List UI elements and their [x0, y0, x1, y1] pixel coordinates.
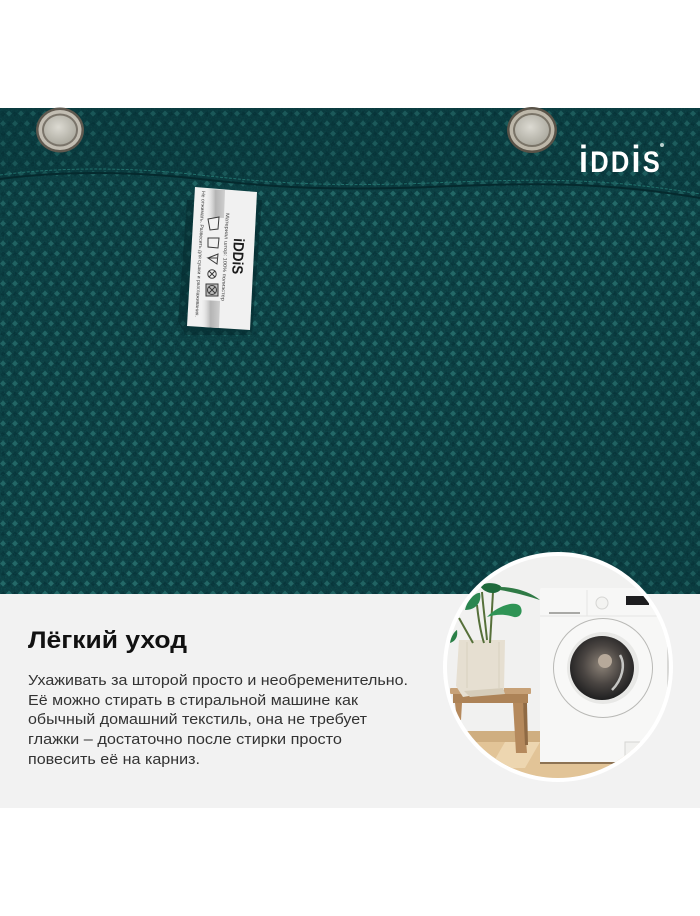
- wall: [447, 556, 636, 731]
- body text: повесить её на карниз.: [28, 751, 200, 768]
- label care icons: [206, 217, 219, 296]
- care label: [187, 187, 257, 330]
- grommet left: [36, 108, 84, 152]
- label material text: Материал штор: 100% полиэстер: [219, 213, 230, 301]
- infographic canvas: [0, 107, 700, 808]
- body text: Её можно стирать в стиральной машине как: [28, 692, 358, 709]
- curtain hem seam: [0, 108, 700, 198]
- body text: [28, 672, 408, 768]
- baseboard: [468, 731, 540, 742]
- wooden stool: [450, 688, 531, 753]
- canvas bag: [456, 640, 505, 697]
- grommet right: [507, 107, 557, 153]
- logo: iDDiS: [579, 139, 660, 181]
- photo: green waffle curtain: [0, 107, 700, 594]
- body text: глажки – достаточно после стирки просто: [28, 731, 342, 748]
- body text: обычный домашний текстиль, она не требует: [28, 711, 367, 728]
- circular photo: washing machine: [440, 550, 680, 790]
- body text: Ухаживать за шторой просто и необременительно.: [28, 672, 408, 689]
- washing machine body: [540, 588, 677, 764]
- label instructions text: Не отжимать. Развесить для сушки и разглаживания.: [193, 191, 206, 317]
- floor: [476, 742, 640, 778]
- label brand: iDDiS: [228, 238, 247, 275]
- label shadow: [178, 200, 262, 335]
- plant: [450, 583, 540, 643]
- heading: Лёгкий уход: [28, 627, 187, 654]
- panel: text background: [0, 594, 700, 808]
